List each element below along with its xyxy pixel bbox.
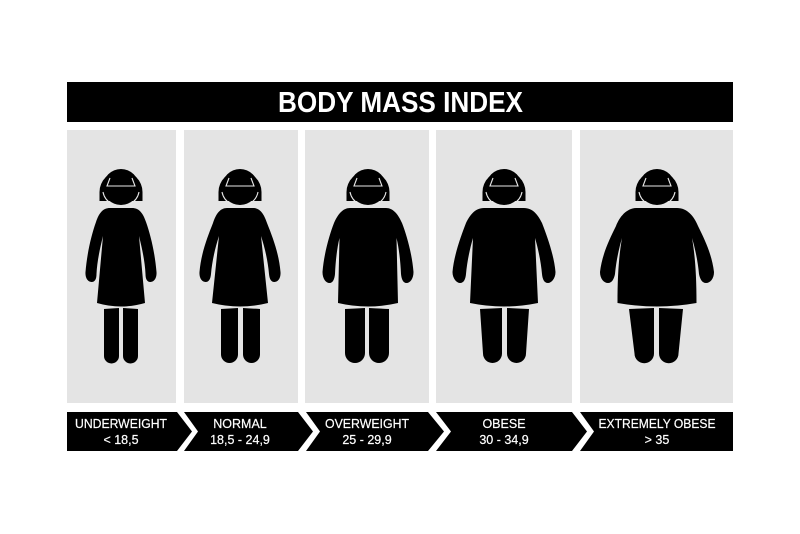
panel: underweight xyxy=(67,130,176,403)
panel: extremely obese xyxy=(580,130,733,403)
icon: obese figure xyxy=(452,169,556,363)
icon: normal figure xyxy=(199,169,281,363)
label arrow: extremely obese: EXTREMELY OBESE xyxy=(598,417,716,431)
panel: normal xyxy=(184,130,298,403)
label arrow: obese: OBESE xyxy=(482,417,526,431)
label arrow: normal xyxy=(184,412,313,451)
title banner xyxy=(67,82,733,122)
label arrow: extremely obese: > 35 xyxy=(645,433,669,447)
icon: extremely obese figure xyxy=(600,169,714,363)
label arrow: overweight: OVERWEIGHT xyxy=(325,417,409,431)
panel: overweight xyxy=(305,130,429,403)
label arrow: normal: 18,5 - 24,9 xyxy=(210,433,270,447)
label arrow: obese: 30 - 34,9 xyxy=(479,433,529,447)
panel: obese xyxy=(436,130,572,403)
label arrow: overweight: 25 - 29,9 xyxy=(342,433,392,447)
label arrow: underweight xyxy=(67,412,192,451)
label arrow: overweight xyxy=(306,412,444,451)
label arrow: extremely obese xyxy=(580,412,733,451)
label arrow: underweight: UNDERWEIGHT xyxy=(75,417,167,431)
icon: underweight figure xyxy=(85,169,157,364)
label arrow: normal: NORMAL xyxy=(213,417,267,431)
title banner: BODY MASS INDEX xyxy=(278,87,523,119)
label arrow: obese xyxy=(436,412,587,451)
icon: overweight figure xyxy=(322,169,414,363)
label arrow: underweight: < 18,5 xyxy=(103,433,139,447)
